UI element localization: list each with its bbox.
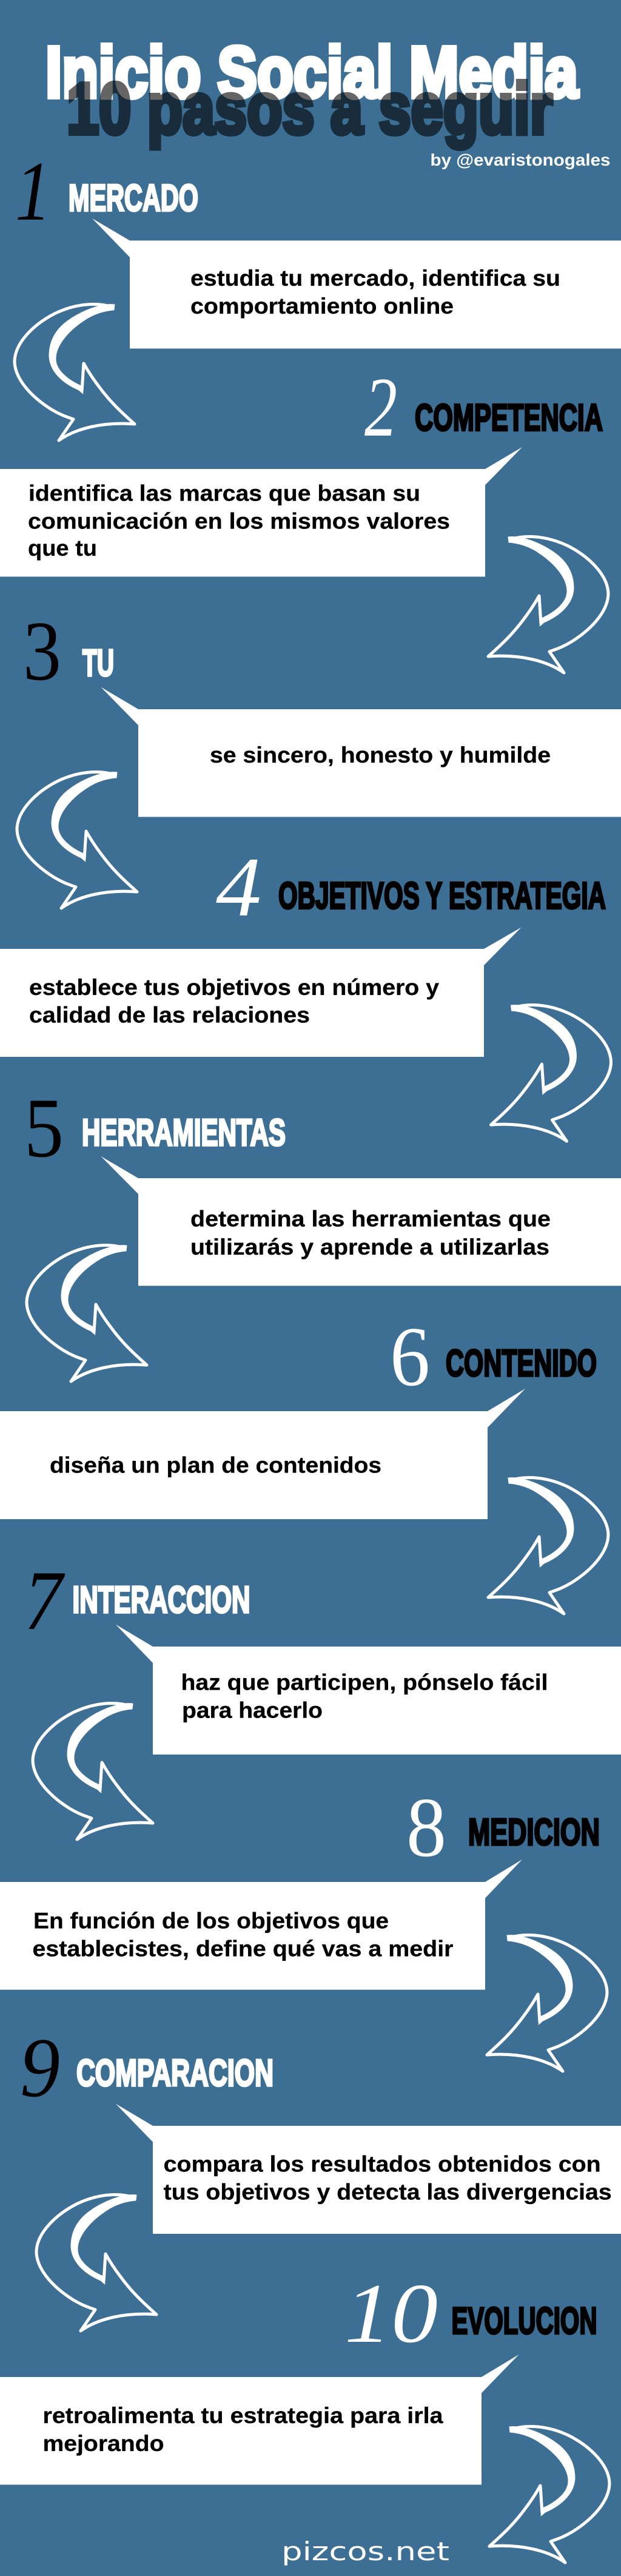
author credit: by @evaristonogales (431, 150, 610, 169)
heading: interaccion: INTERACCION (73, 1579, 250, 1621)
heading: tu: TU (82, 642, 114, 684)
speech bubble (101, 687, 621, 817)
bubble text (33, 1909, 453, 1961)
arrow (489, 2426, 609, 2563)
speech bubble (0, 1389, 525, 1519)
bubble text: comportamiento online (190, 294, 454, 319)
step 6 (0, 1310, 608, 1614)
speech bubble (0, 447, 522, 576)
speech bubble (92, 218, 621, 348)
number 6: 6 (390, 1310, 430, 1404)
arrow (491, 1005, 611, 1141)
bubble text: establecistes, define qué vas a medir (33, 1937, 453, 1961)
step 2 (0, 360, 608, 673)
bubble text: En función de los objetivos que (33, 1909, 389, 1934)
heading: comparacion: COMPARACION (76, 2052, 274, 2094)
bubble text (181, 1670, 548, 1723)
speech bubble (0, 2355, 519, 2485)
title (45, 32, 579, 149)
bubble text (28, 480, 450, 561)
bubble text: tus objetivos y detecta las divergencias (164, 2179, 612, 2205)
speech bubble (101, 1156, 621, 1286)
arrow (488, 536, 608, 673)
step 8 (0, 1781, 607, 2071)
arrow (487, 1935, 607, 2071)
bubble text: retroalimenta tu estrategia para irla (42, 2403, 443, 2428)
bubble text: se sincero, honesto y humilde (210, 743, 551, 767)
number 9: 9 (20, 2021, 60, 2115)
number 7: 7 (24, 1554, 65, 1648)
arrow (488, 1477, 608, 1614)
heading: mercado: MERCADO (69, 177, 198, 220)
number 2: 2 (364, 360, 397, 454)
bubble text (190, 266, 560, 319)
bubble text: para hacerlo (182, 1698, 323, 1723)
heading: herramientas: HERRAMIENTAS (82, 1112, 286, 1154)
arrow (15, 304, 135, 440)
number 10: 10 (344, 2267, 438, 2361)
bubble text: haz que participen, pónselo fácil (181, 1670, 548, 1695)
logo: pixcos.net: pizcos.net (281, 2537, 449, 2566)
arrow (33, 1703, 153, 1839)
bubble text: compara los resultados obtenidos con (164, 2152, 601, 2177)
number 5: 5 (24, 1081, 64, 1175)
step 5 (24, 1081, 621, 1381)
bubble text (29, 975, 439, 1028)
speech bubble (116, 2104, 621, 2234)
bubble text: determina las herramientas que (190, 1206, 551, 1231)
bubble text: estudia tu mercado, identifica su (190, 266, 560, 291)
bubble text (190, 1206, 551, 1259)
bubble text: que tu (28, 536, 97, 561)
bubble text: comunicación en los mismos valores (28, 508, 450, 534)
step 1 (15, 144, 621, 440)
arrow (36, 2194, 156, 2331)
bubble text: mejorando (42, 2431, 164, 2456)
number 1: 1 (15, 144, 51, 238)
bubble text (164, 2152, 612, 2205)
number 3: 3 (23, 604, 61, 698)
bubble text: identifica las marcas que basan su (29, 480, 420, 506)
bubble text: establece tus objetivos en número y (29, 975, 439, 1000)
step 9 (20, 2021, 621, 2331)
number 4: 4 (216, 840, 261, 934)
bubble text: utilizarás y aprende a utilizarlas (190, 1235, 549, 1259)
bubble text (42, 2403, 443, 2456)
bubble text: diseña un plan de contenidos (50, 1452, 381, 1478)
speech bubble (0, 1860, 522, 1990)
step 4 (0, 840, 611, 1141)
step 10 (0, 2267, 609, 2563)
step 7 (24, 1554, 621, 1839)
arrow (17, 772, 137, 908)
step 3 (17, 604, 621, 908)
speech bubble (116, 1625, 621, 1755)
bubble text: calidad de las relaciones (29, 1003, 310, 1028)
speech bubble (0, 928, 522, 1057)
arrow (27, 1245, 147, 1381)
number 8: 8 (406, 1781, 446, 1875)
